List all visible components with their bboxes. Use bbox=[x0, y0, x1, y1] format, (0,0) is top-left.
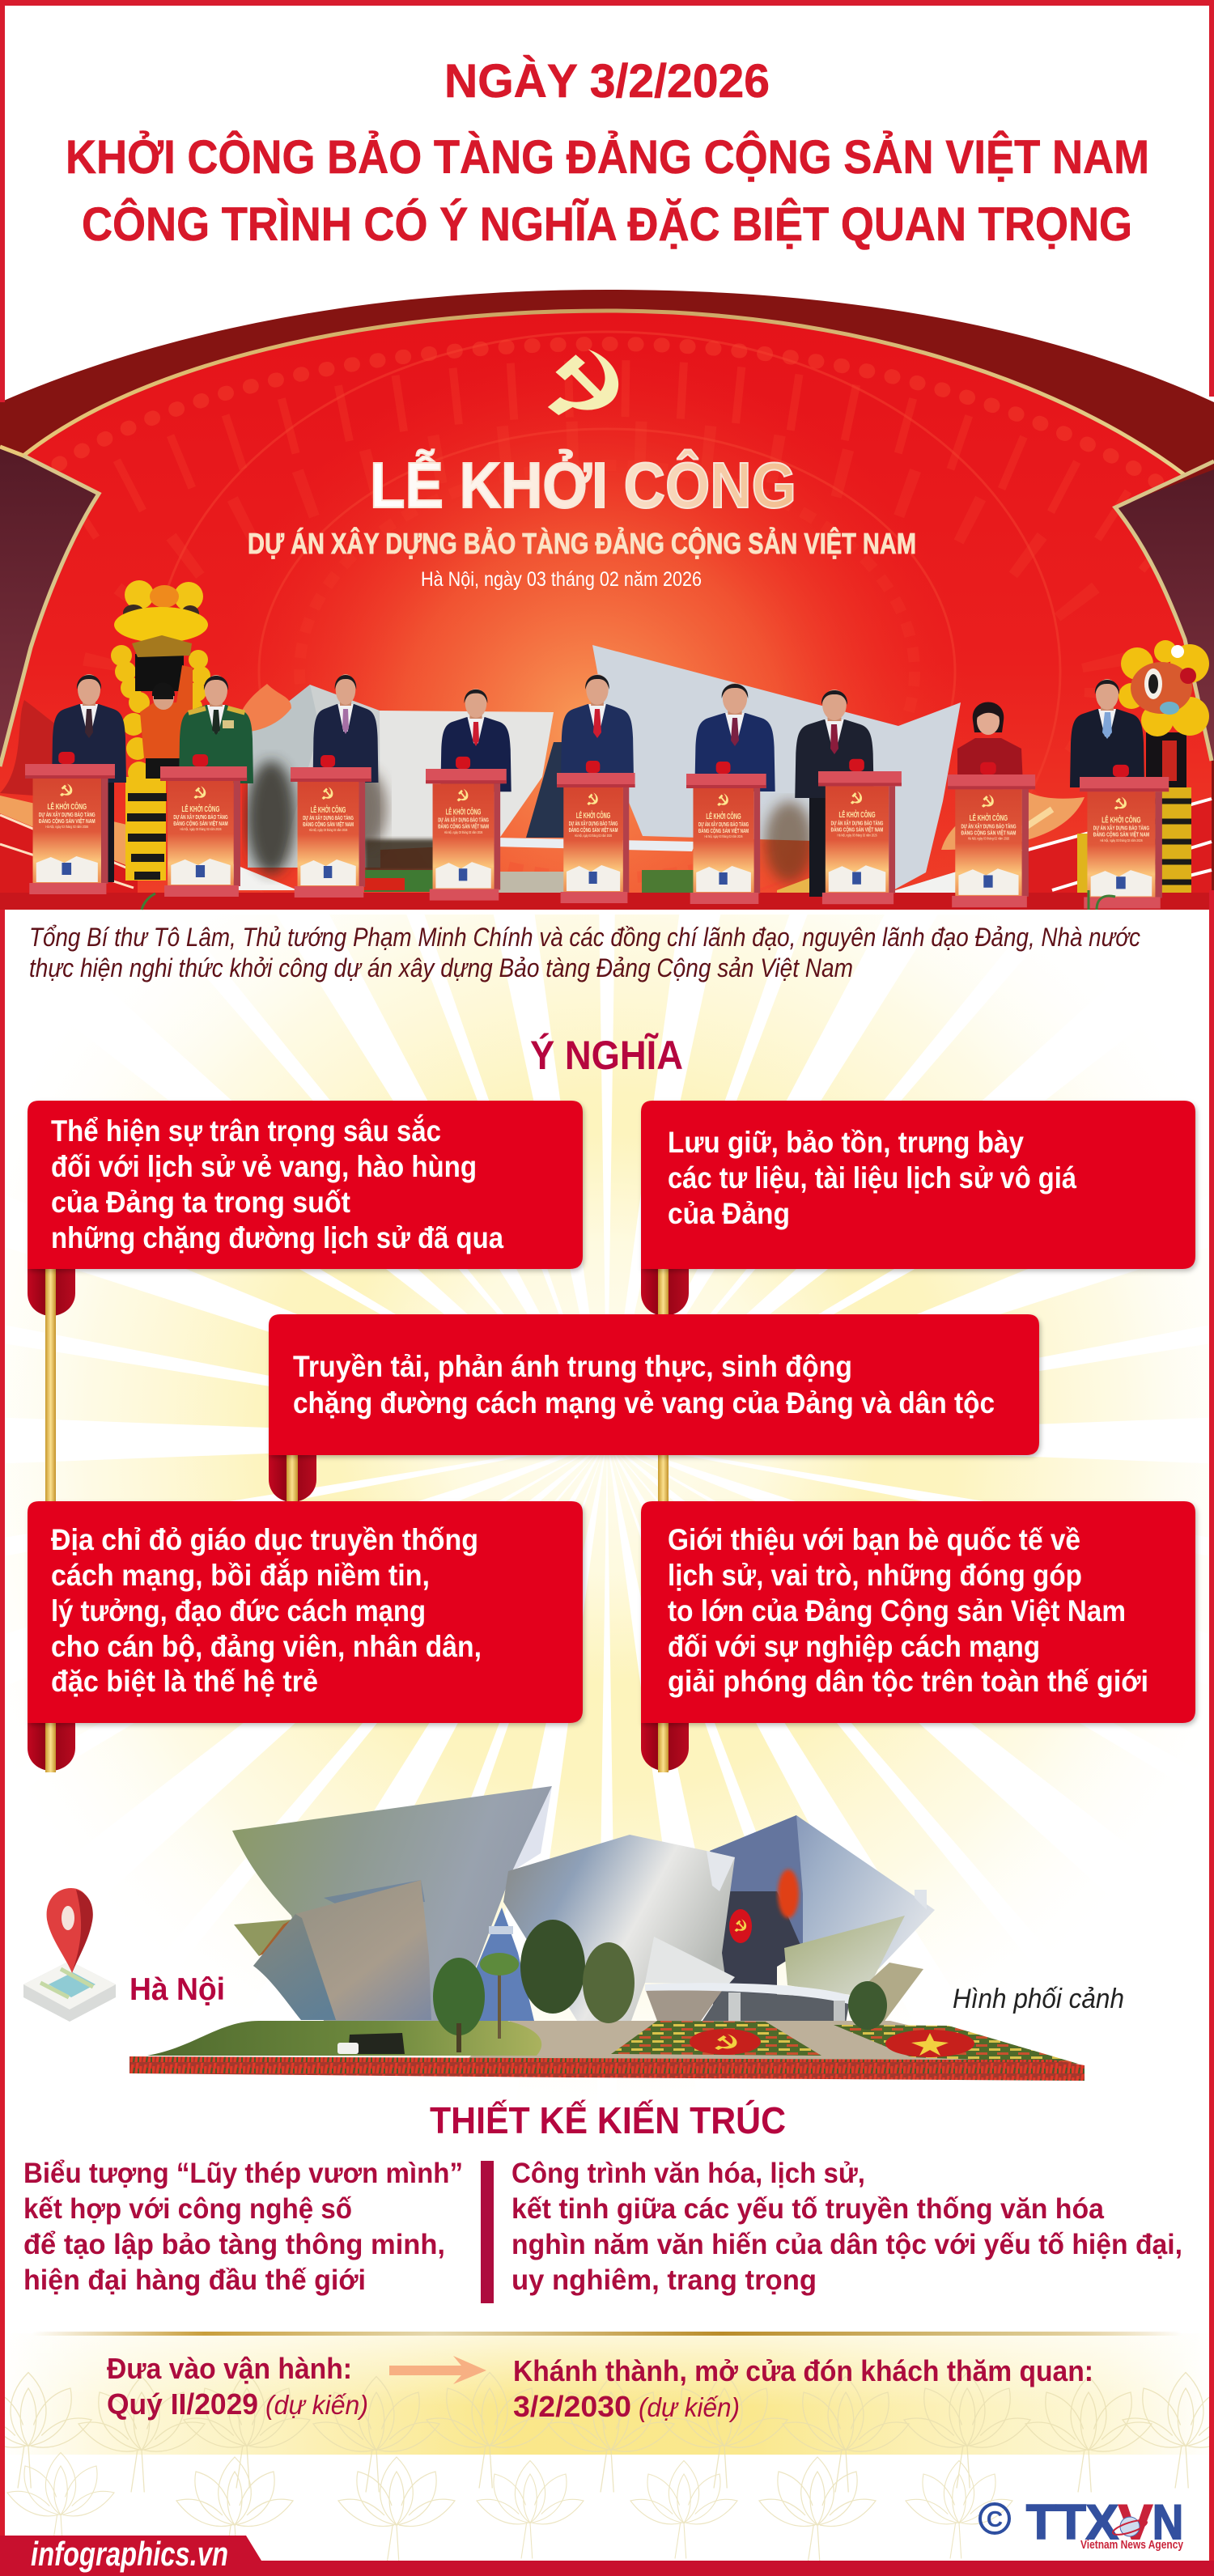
background building on screen bbox=[232, 645, 961, 901]
logo: TTXVN: Vietnam News Agency bbox=[1080, 2539, 1183, 2552]
lion dancer left bbox=[111, 580, 210, 881]
podium row bbox=[25, 752, 1169, 909]
arrow bbox=[389, 2356, 486, 2384]
panel: meaning 2: Lưu giữ, bảo tồn, trưng bày bbox=[668, 1126, 1024, 1159]
person 1 bbox=[52, 674, 126, 882]
architecture text left: Biểu tượng “Lũy thép vươn mình” bbox=[23, 2158, 463, 2189]
dancer bbox=[140, 665, 193, 779]
podium 8: LỄ KHỞI CÔNG bbox=[970, 813, 1008, 823]
museum perspective illustration bbox=[129, 1786, 1085, 2081]
architecture text left: để tạo lập bảo tàng thông minh, bbox=[23, 2229, 445, 2260]
title: NGÀY 3/2/2026 bbox=[444, 55, 770, 108]
podium 3: Hà Nội, ngày 03 tháng 02 năm 2026 bbox=[309, 828, 348, 832]
panel: meaning 3: chặng đường cách mạng vẻ vang của Đảng và dân tộc bbox=[293, 1386, 995, 1420]
podium 4: LỄ KHỞI CÔNG bbox=[446, 807, 482, 817]
podium 7: LỄ KHỞI CÔNG bbox=[838, 809, 876, 820]
panel: meaning 1: Thể hiện sự trân trọng sâu sắc bbox=[51, 1114, 441, 1148]
podium 8: Hà Nội, ngày 03 tháng 02 năm 2026 bbox=[968, 837, 1010, 841]
front panels right bbox=[645, 1937, 735, 1984]
panel: meaning 1 bbox=[28, 1101, 583, 1318]
podium 9: Hà Nội, ngày 03 tháng 02 năm 2026 bbox=[1100, 838, 1143, 842]
podium 5: ĐẢNG CỘNG SẢN VIỆT NAM bbox=[569, 826, 618, 834]
podium 4: ĐẢNG CỘNG SẢN VIỆT NAM bbox=[438, 823, 489, 830]
blue glass window bbox=[465, 1908, 534, 2021]
building facets bbox=[232, 1786, 935, 2023]
podium 3: ĐẢNG CỘNG SẢN VIỆT NAM bbox=[303, 821, 354, 828]
timeline start: (dự kiến) bbox=[265, 2390, 368, 2420]
podium 5 bbox=[557, 761, 635, 903]
heading: meaning: Ý NGHĨA bbox=[530, 1033, 683, 1078]
person 5 bbox=[561, 674, 634, 783]
screen title: Hà Nội, ngày 03 tháng 02 năm 2026 bbox=[421, 568, 702, 591]
emblems on building bbox=[729, 1869, 799, 1943]
panel: meaning 2: của Đảng bbox=[668, 1197, 790, 1230]
logo: TTXVN: N bbox=[1152, 2495, 1183, 2549]
podium 4: DỰ ÁN XÂY DỰNG BẢO TÀNG bbox=[438, 816, 489, 824]
timeline end: Khánh thành, mở cửa đón khách thăm quan: bbox=[513, 2354, 1093, 2387]
lion dancer right bbox=[1077, 640, 1209, 905]
person 2: general bbox=[179, 675, 253, 783]
right back panel bbox=[710, 1815, 935, 1980]
timeline band bbox=[0, 2332, 1214, 2455]
icon: map pin on tile bbox=[23, 1888, 116, 2022]
middle panel bbox=[503, 1835, 735, 2021]
photo caption bbox=[29, 923, 1140, 982]
podium 9: ĐẢNG CỘNG SẢN VIỆT NAM bbox=[1093, 831, 1149, 838]
divider bar bbox=[481, 2161, 494, 2303]
panel: meaning 3: Truyền tải, phản ánh trung thực, sinh động bbox=[293, 1350, 852, 1383]
panel: meaning 4: cho cán bộ, đảng viên, nhân dân, bbox=[51, 1630, 482, 1663]
architecture text right: kết tinh giữa các yếu tố truyền thống văn hóa bbox=[511, 2193, 1105, 2225]
panel: meaning 2 bbox=[641, 1101, 1195, 1318]
icon: hammer and sickle bbox=[548, 350, 618, 415]
architecture text left: hiện đại hàng đầu thế giới bbox=[23, 2264, 366, 2296]
panel: meaning 1: của Đảng ta trong suốt bbox=[51, 1186, 350, 1219]
panel: meaning 5: đối với sự nghiệp cách mạng bbox=[668, 1630, 1040, 1663]
people on stage bbox=[52, 674, 1144, 897]
podium 8 bbox=[948, 762, 1035, 907]
podium 6: ĐẢNG CỘNG SẢN VIỆT NAM bbox=[698, 827, 749, 834]
flower border strip bbox=[129, 2056, 1085, 2081]
podium 9: LỄ KHỞI CÔNG bbox=[1102, 815, 1141, 825]
screen title: DỰ ÁN XÂY DỰNG BẢO TÀNG ĐẢNG CỘNG SẢN VIỆT NAM bbox=[248, 526, 916, 560]
flower carpets bbox=[611, 2021, 1078, 2064]
logo: TTXVN: TTX bbox=[1026, 2495, 1118, 2549]
front left panel bbox=[253, 1880, 431, 2020]
podium 6: DỰ ÁN XÂY DỰNG BẢO TÀNG bbox=[698, 821, 749, 828]
podium 7 bbox=[818, 759, 902, 904]
back panel left bbox=[232, 1786, 552, 2021]
podium 2: Hà Nội, ngày 03 tháng 02 năm 2026 bbox=[180, 827, 222, 831]
stage floor bbox=[0, 893, 1212, 910]
timeline end: (dự kiến) bbox=[639, 2392, 740, 2422]
photo: groundbreaking ceremony stage bbox=[0, 290, 1214, 910]
person 3 bbox=[313, 674, 378, 783]
lotus line art bbox=[0, 2373, 1214, 2564]
heading: architecture: THIẾT KẾ KIẾN TRÚC bbox=[430, 2099, 786, 2141]
panel: meaning 5: lịch sử, vai trò, những đóng góp bbox=[668, 1559, 1082, 1592]
timeline start: Đưa vào vận hành: bbox=[107, 2352, 352, 2385]
panel: meaning 4: đặc biệt là thế hệ trẻ bbox=[51, 1665, 318, 1698]
logo: TTXVN: C bbox=[987, 2506, 1003, 2531]
panel: meaning 4: Địa chỉ đỏ giáo dục truyền thống bbox=[51, 1523, 478, 1556]
furry body bbox=[111, 645, 210, 881]
screen title bbox=[248, 449, 916, 591]
podium 6: Hà Nội, ngày 03 tháng 02 năm 2026 bbox=[705, 834, 743, 838]
title: CÔNG TRÌNH CÓ Ý NGHĨA ĐẶC BIỆT QUAN TRỌNG bbox=[82, 198, 1132, 251]
podium 7: ĐẢNG CỘNG SẢN VIỆT NAM bbox=[831, 825, 883, 833]
podium 2: DỰ ÁN XÂY DỰNG BẢO TÀNG bbox=[173, 813, 228, 821]
podium 2: LỄ KHỞI CÔNG bbox=[182, 804, 220, 814]
entrance bbox=[701, 1991, 850, 2023]
podium 5: LỄ KHỞI CÔNG bbox=[576, 811, 610, 821]
podium 5: Hà Nội, ngày 03 tháng 02 năm 2026 bbox=[575, 834, 612, 838]
architecture text right: Công trình văn hóa, lịch sử, bbox=[511, 2158, 865, 2189]
podium 9 bbox=[1080, 765, 1169, 909]
gold trim bbox=[0, 311, 1214, 766]
logo: TTXVN: V bbox=[1118, 2495, 1152, 2549]
timeline start: Quý II/2029 bbox=[107, 2387, 258, 2421]
connector sticks behind boxes bbox=[45, 1269, 669, 1502]
architecture text right: uy nghiêm, trang trọng bbox=[511, 2264, 817, 2296]
podium 5: DỰ ÁN XÂY DỰNG BẢO TÀNG bbox=[569, 820, 618, 827]
podium 6: LỄ KHỞI CÔNG bbox=[706, 812, 741, 821]
podium 1: Hà Nội, ngày 03 tháng 02 năm 2026 bbox=[45, 825, 89, 829]
ground and path bbox=[147, 2021, 1085, 2072]
person 4 bbox=[440, 689, 511, 791]
podium 4 bbox=[426, 757, 507, 901]
panel: meaning 5 bbox=[641, 1501, 1195, 1772]
panel: meaning 5: Giới thiệu với bạn bè quốc tế về bbox=[668, 1523, 1080, 1556]
logo: TTXVN bbox=[980, 2495, 1183, 2552]
screen bronze drum pattern bbox=[52, 330, 1164, 882]
podium 3: LỄ KHỞI CÔNG bbox=[311, 805, 346, 815]
side panels bbox=[0, 447, 1214, 766]
podium 7: DỰ ÁN XÂY DỰNG BẢO TÀNG bbox=[831, 819, 884, 826]
podium 2 bbox=[160, 754, 247, 897]
podium 7: Hà Nội, ngày 03 tháng 02 năm 2026 bbox=[838, 834, 877, 838]
panel: meaning 3 bbox=[269, 1314, 1039, 1502]
podium 6 bbox=[686, 762, 766, 904]
title bbox=[66, 55, 1149, 251]
panel: meaning 4: cách mạng, bồi đắp niềm tin, bbox=[51, 1558, 430, 1592]
lion head bbox=[114, 580, 208, 657]
podium 3 bbox=[291, 755, 371, 898]
podium 4: Hà Nội, ngày 03 tháng 02 năm 2026 bbox=[444, 830, 483, 834]
podium 2: ĐẢNG CỘNG SẢN VIỆT NAM bbox=[173, 820, 228, 827]
panel: meaning 5: to lớn của Đảng Cộng sản Việt Nam bbox=[668, 1594, 1126, 1628]
timeline end: 3/2/2030 bbox=[513, 2390, 631, 2423]
stage arch band bbox=[0, 290, 1214, 910]
illustration caption: Hình phối cảnh bbox=[953, 1984, 1124, 2014]
architecture text left bbox=[23, 2158, 463, 2296]
panel: meaning 1: những chặng đường lịch sử đã qua bbox=[51, 1221, 503, 1254]
panel: meaning 4: lý tưởng, đạo đức cách mạng bbox=[51, 1594, 426, 1628]
LED screen bbox=[0, 311, 1212, 898]
photo caption: thực hiện nghi thức khởi công dự án xây dựng Bảo tàng Đảng Cộng sản Việt Nam bbox=[29, 953, 853, 982]
footer tag: infographics.vn bbox=[31, 2535, 228, 2573]
red carpets with stripes bbox=[0, 796, 1212, 904]
person 8: woman in red bbox=[957, 702, 1023, 785]
panel: meaning 4 bbox=[28, 1501, 583, 1772]
podium 1 bbox=[25, 752, 115, 894]
podium 1: DỰ ÁN XÂY DỰNG BẢO TÀNG bbox=[39, 811, 96, 818]
architecture text right: nghìn năm văn hiến của dân tộc với yếu tố hiện đại, bbox=[511, 2229, 1182, 2260]
architecture text right bbox=[511, 2158, 1182, 2296]
screen title: LỄ KHỞI CÔNG bbox=[370, 449, 796, 521]
podium 9: DỰ ÁN XÂY DỰNG BẢO TÀNG bbox=[1093, 825, 1149, 832]
timeline start bbox=[107, 2352, 368, 2421]
panel: meaning 2: các tư liệu, tài liệu lịch sử vô giá bbox=[668, 1161, 1076, 1195]
location label: Hà Nội bbox=[129, 1972, 225, 2007]
panel: meaning 1: đối với lịch sử vẻ vang, hào hùng bbox=[51, 1150, 477, 1183]
trees bbox=[433, 1920, 887, 2052]
architecture text left: kết hợp với công nghệ số bbox=[23, 2193, 352, 2225]
podium 8: ĐẢNG CỘNG SẢN VIỆT NAM bbox=[961, 829, 1016, 836]
timeline end bbox=[513, 2354, 1093, 2423]
green sprigs bbox=[142, 890, 1115, 910]
panel: meaning 5: giải phóng dân tộc trên toàn thế giới bbox=[668, 1665, 1148, 1698]
person 7 bbox=[795, 690, 874, 897]
person 6 bbox=[694, 683, 775, 791]
podium 8: DỰ ÁN XÂY DỰNG BẢO TÀNG bbox=[961, 822, 1017, 830]
podium 1: LỄ KHỞI CÔNG bbox=[47, 801, 87, 812]
person 9 bbox=[1070, 679, 1144, 787]
podium 1: ĐẢNG CỘNG SẢN VIỆT NAM bbox=[39, 817, 96, 825]
podium 3: DỰ ÁN XÂY DỰNG BẢO TÀNG bbox=[303, 814, 354, 821]
lotus decorations bbox=[0, 684, 1085, 850]
